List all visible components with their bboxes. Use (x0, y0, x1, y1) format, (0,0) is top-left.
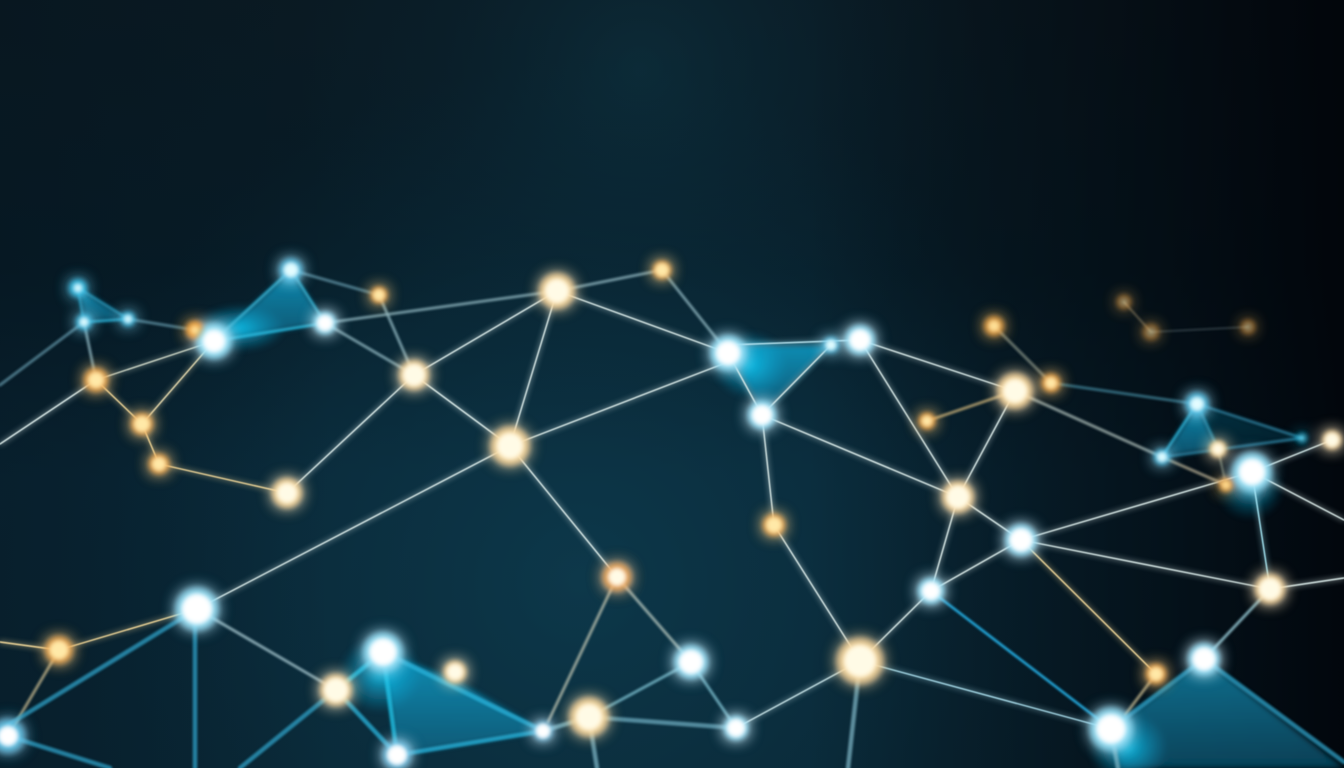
nodes: upper-left cluster (67, 256, 389, 510)
nodes: lower-middle cluster (567, 560, 886, 742)
translucent cyan triangles (78, 270, 1344, 768)
nodes: upper-middle cluster (397, 259, 877, 538)
network links, blue foreground (8, 591, 1344, 768)
network links, soft and wide (0, 270, 1302, 736)
network links, crisp and bright (0, 291, 1344, 729)
nodes: upper-right cluster (916, 314, 1343, 606)
nodes: faint distant cluster (1115, 293, 1257, 342)
nodes: lower-left cluster (0, 585, 555, 768)
nodes: lower-right cluster (1087, 641, 1222, 753)
